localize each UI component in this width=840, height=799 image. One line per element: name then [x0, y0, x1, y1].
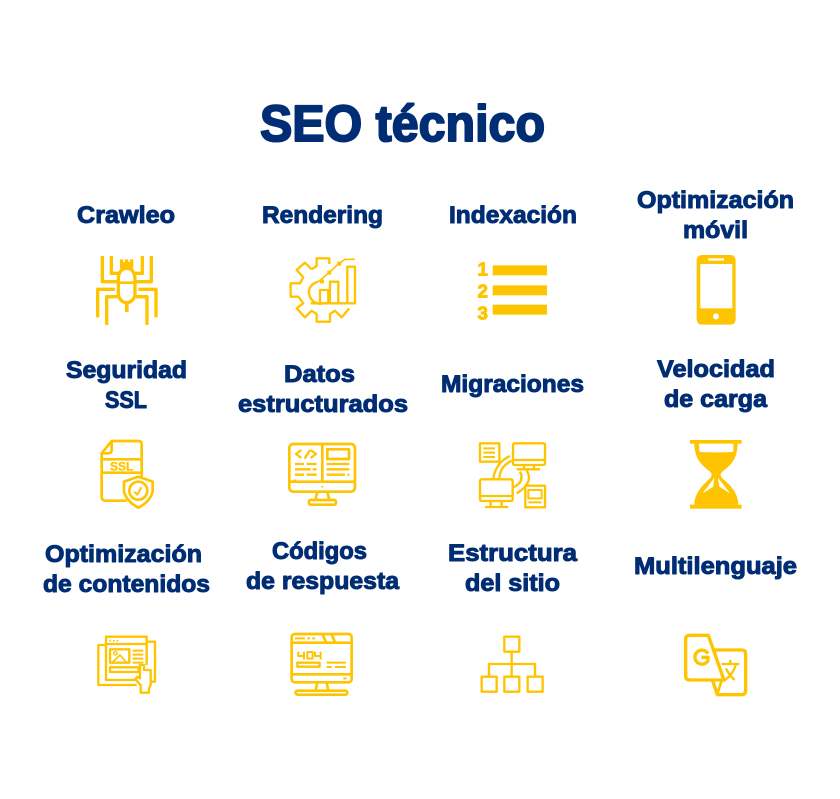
icon: site hierarchy: [482, 637, 543, 692]
label: Datos estructurados: estructurados: [238, 391, 408, 418]
icon: smartphone: [697, 255, 736, 325]
label: Optimización de contenidos: [43, 541, 210, 598]
icon: hourglass: [690, 440, 742, 509]
label: Optimización de contenidos: de contenidos: [43, 571, 210, 598]
label: Seguridad SSL: SSL: [105, 387, 147, 414]
label: Datos estructurados: Datos: [284, 361, 355, 388]
icon: code monitor: [289, 444, 355, 505]
label: Multilenguaje: Multilenguaje: [634, 553, 797, 580]
label: Velocidad de carga: de carga: [664, 386, 768, 413]
label: Migraciones: Migraciones: [441, 371, 584, 398]
icon: gear with bar chart: [291, 258, 355, 322]
label: Seguridad SSL: [66, 357, 187, 414]
label: Velocidad de carga: [657, 356, 775, 413]
label: Velocidad de carga: Velocidad: [657, 356, 775, 383]
icon: SSL document with shield: [102, 441, 153, 508]
icon: 404 monitor: [292, 634, 352, 695]
title: SEO técnico: [260, 95, 545, 152]
icon: numbered list: [477, 259, 547, 323]
label: Rendering: Rendering: [262, 202, 383, 229]
icon: content windows with hand: [98, 637, 155, 693]
label: Optimización de contenidos: Optimización: [45, 541, 202, 568]
label: Crawleo: Crawleo: [77, 202, 175, 229]
label: Optimización móvil: [637, 187, 794, 244]
label: Estructura del sitio: Estructura: [448, 540, 578, 567]
icon: migration between screens: [480, 443, 545, 507]
label: Seguridad SSL: Seguridad: [66, 357, 187, 384]
label: Códigos de respuesta: Códigos: [272, 538, 367, 565]
label: Optimización móvil: móvil: [683, 217, 748, 244]
label: Estructura del sitio: [448, 540, 578, 597]
label: Optimización móvil: Optimización: [637, 187, 794, 214]
icon: spider bug: [98, 256, 156, 325]
label: Indexación: Indexación: [449, 202, 577, 229]
label: Estructura del sitio: del sitio: [465, 570, 560, 597]
icon: SSL document with shield: SSL: [110, 459, 133, 473]
label: Códigos de respuesta: de respuesta: [246, 568, 400, 595]
icon: numbered list: 2: [477, 280, 488, 301]
icon: numbered list: 1: [477, 259, 488, 280]
label: Datos estructurados: [238, 361, 408, 418]
icon: translate: [686, 635, 746, 695]
label: Códigos de respuesta: [246, 538, 400, 595]
icon: numbered list: 3: [477, 302, 488, 323]
